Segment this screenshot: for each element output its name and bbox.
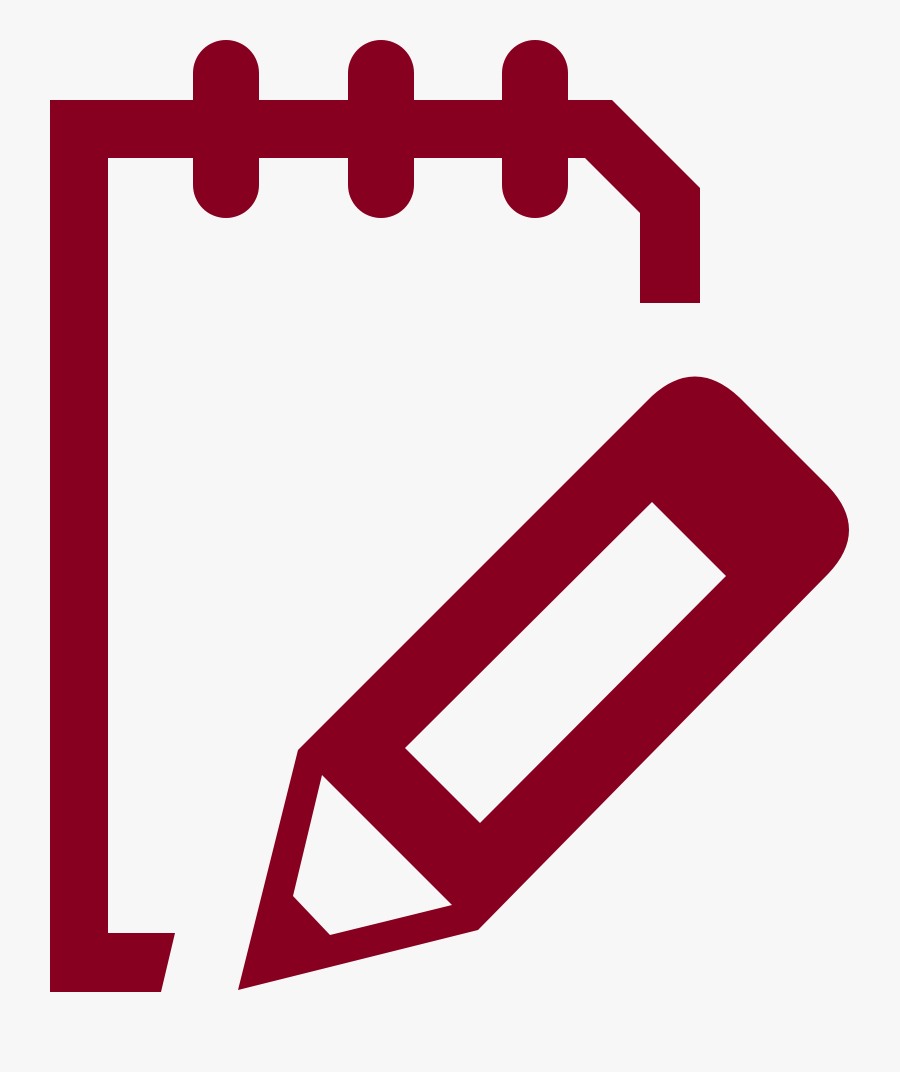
icon: notepad outline	[50, 100, 700, 992]
icon: spiral rings	[193, 40, 568, 218]
icon: pencil	[238, 376, 849, 990]
